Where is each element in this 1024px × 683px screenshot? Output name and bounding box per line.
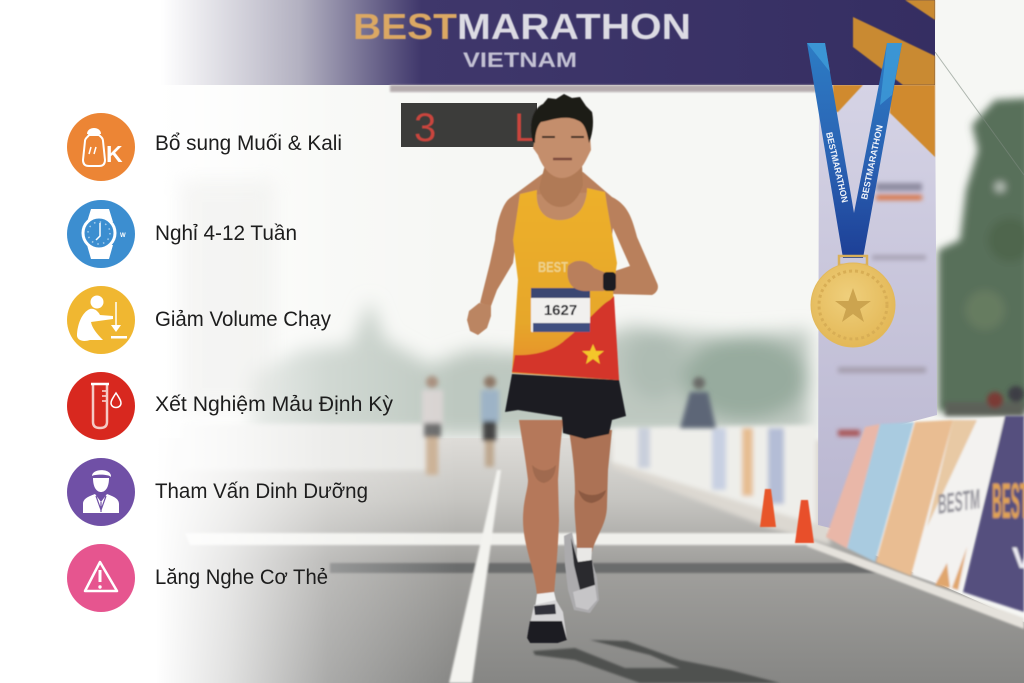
medal star	[835, 288, 871, 322]
neck and head	[531, 94, 593, 207]
medal loop	[839, 256, 867, 265]
banner title: VIETNAM	[463, 49, 577, 72]
distant runners and official	[422, 376, 716, 475]
race bib	[531, 288, 590, 332]
back barrier right	[612, 425, 816, 524]
icon: seated person and down arrow	[67, 286, 135, 354]
list item: listen to body	[67, 544, 328, 612]
finish line and road markings	[185, 470, 1024, 683]
banner title: MARATHON	[457, 6, 691, 47]
runner	[467, 94, 780, 683]
roadside sponsor boards	[826, 416, 1024, 612]
icon: doctor	[67, 458, 135, 526]
finish clock: 3	[414, 106, 436, 150]
sponsor logos	[838, 183, 926, 436]
icon: watch: W	[120, 233, 126, 239]
banner orange stripes	[853, 0, 935, 85]
traffic cones	[760, 489, 814, 543]
distant trees	[250, 300, 810, 440]
back barrier left	[180, 424, 430, 470]
label: Lăng Nghe Cơ Thẻ	[155, 566, 328, 589]
list item: blood test	[67, 372, 393, 440]
label: Bổ sung Muối & Kali	[155, 132, 342, 155]
banner title	[353, 6, 691, 72]
medal: BESTMARATHON	[859, 124, 885, 200]
finish gantry banner	[120, 0, 935, 92]
medal ribbon	[807, 43, 902, 258]
faint hazy building	[180, 180, 275, 410]
medal	[807, 43, 902, 347]
banner title: BEST	[353, 6, 457, 47]
chest skin	[514, 192, 612, 250]
icon: test tube and drop	[67, 372, 135, 440]
front hand and watch	[467, 261, 616, 335]
list item: nutrition consult	[67, 458, 368, 526]
runner shadow	[533, 640, 780, 683]
back arm and shoulders	[480, 172, 658, 306]
icon: watch	[67, 200, 135, 268]
white left fade	[0, 0, 520, 683]
right shoe	[564, 532, 599, 613]
label: Xết Nghiệm Mảu Định Kỳ	[155, 393, 393, 416]
label: Tham Vấn Dinh Dưỡng	[155, 480, 368, 503]
gantry pillar	[818, 85, 937, 530]
singlet star	[582, 344, 604, 364]
icon: salt shaker K	[67, 113, 135, 181]
label: Nghỉ 4-12 Tuần	[155, 222, 297, 245]
distant spectators	[945, 386, 1024, 416]
ribbon text: BESTMARATHON	[824, 131, 850, 204]
icon: warning triangle	[67, 544, 135, 612]
right tree	[938, 98, 1024, 412]
medal disc	[811, 263, 895, 347]
face details	[542, 136, 584, 138]
guy wire	[935, 52, 1024, 175]
singlet logo: BEST	[538, 259, 568, 276]
race bib: 1627	[544, 302, 577, 319]
shorts	[505, 374, 626, 439]
roadside sponsor boards: BESTM	[938, 483, 980, 520]
list item: rest weeks	[67, 200, 297, 268]
singlet	[512, 188, 619, 380]
road surface	[0, 438, 1024, 683]
list item: salt and potassium	[67, 113, 342, 181]
icon: salt shaker K: K	[106, 141, 123, 167]
hair	[531, 94, 593, 143]
finish clock	[401, 103, 537, 150]
legs	[519, 420, 563, 595]
label: Giảm Volume Chạy	[155, 308, 331, 331]
sidewalk	[612, 440, 830, 545]
left shoe	[527, 592, 567, 643]
list item: reduce volume	[67, 286, 331, 354]
finish clock: L	[514, 106, 536, 150]
